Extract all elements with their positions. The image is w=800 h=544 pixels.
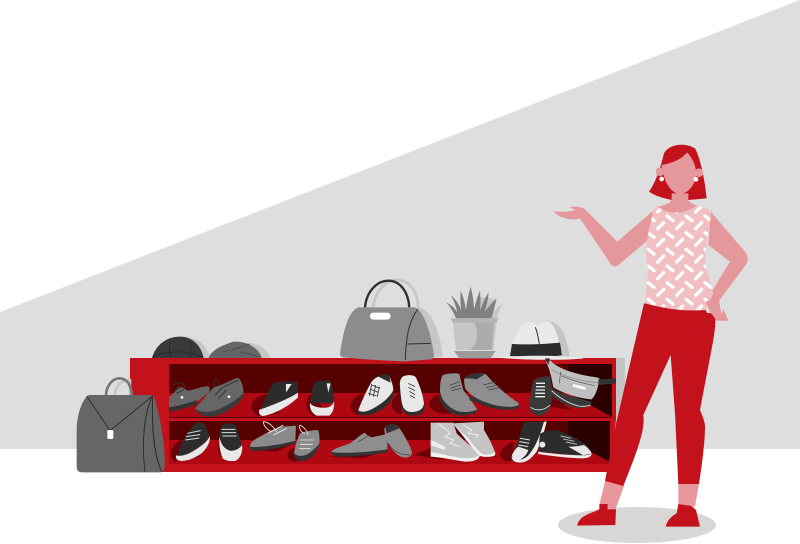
fingers over waist: [706, 297, 728, 321]
shoes right half: [330, 358, 616, 463]
black slip-ons: [260, 381, 298, 409]
left leather bag: [77, 378, 165, 472]
potted plant: [446, 287, 502, 358]
brown shoe pair: [169, 386, 210, 410]
black trainers: [177, 422, 210, 458]
black high-top: [529, 376, 552, 416]
black canvas high-tops: [511, 422, 547, 463]
panama hat: [496, 322, 584, 360]
shoe shelf: [130, 358, 625, 472]
bum bag: [546, 361, 600, 399]
shoes left half: [169, 378, 334, 462]
grey brogues: [440, 373, 478, 414]
patterned top: [645, 205, 713, 310]
neck and face: [655, 193, 698, 215]
white high-tops: [431, 423, 479, 460]
grey loafers: [332, 433, 387, 456]
shoe shadows: [171, 393, 327, 462]
ground shadow: [558, 507, 716, 543]
grey lace-ups: [250, 426, 296, 448]
legs and shoes: [577, 303, 715, 527]
sneaker under bag: [552, 388, 592, 408]
white sneakers: [358, 375, 393, 413]
woman: [553, 145, 748, 543]
torso, head and arms: [553, 145, 748, 330]
hair back: [649, 145, 707, 200]
handbag on shelf: [340, 280, 443, 361]
hats behind shelf: [152, 336, 271, 360]
hip arm: [706, 212, 748, 321]
shoe shadows: [330, 392, 570, 462]
pointing arm: [553, 207, 653, 266]
